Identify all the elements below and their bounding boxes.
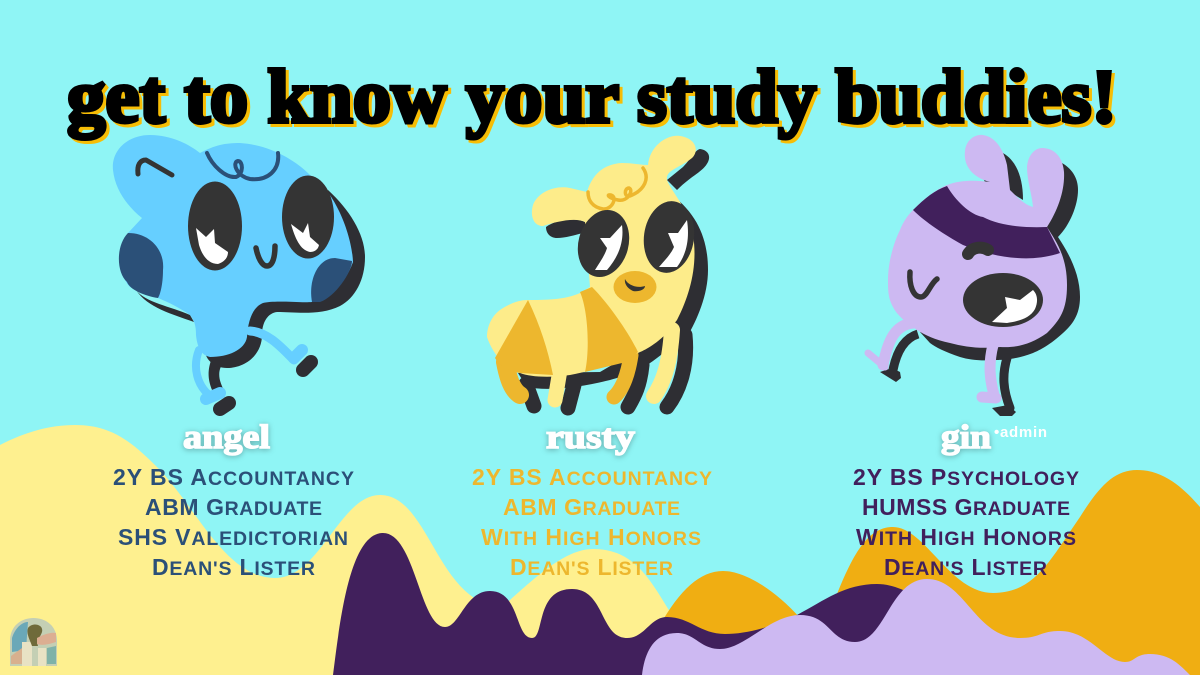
details: angel: DEAN'S LISTER (152, 554, 315, 580)
angel shadow (136, 190, 365, 398)
gin headband (913, 186, 1060, 258)
details: rusty: ABM GRADUATE (503, 494, 680, 520)
rusty stripes (495, 287, 638, 375)
angel body (113, 135, 353, 357)
character: gin (868, 135, 1080, 416)
details: rusty: WITH HIGH HONORS (481, 524, 701, 550)
details: gin (853, 464, 1079, 580)
details: angel: ABM GRADUATE (145, 494, 322, 520)
details: rusty (472, 464, 712, 580)
details: gin: WITH HIGH HONORS (856, 524, 1076, 550)
gin shadow (920, 153, 1080, 360)
logo badge (10, 618, 57, 666)
gin body (888, 135, 1067, 348)
rusty snout (614, 271, 656, 303)
gin dark legs (880, 334, 1016, 416)
angel legs (196, 331, 302, 399)
details: rusty: 2Y BS ACCOUNTANCY (472, 464, 712, 490)
column: rusty (472, 419, 712, 580)
angel cheeks (119, 233, 352, 302)
details: rusty: DEAN'S LISTER (510, 554, 673, 580)
rusty dark legs (526, 335, 686, 408)
details: angel: 2Y BS ACCOUNTANCY (113, 464, 354, 490)
name: angel: angel (183, 419, 270, 456)
details: angel: SHS VALEDICTORIAN (118, 524, 348, 550)
background wavy hills (0, 425, 1200, 675)
details: gin: 2Y BS PSYCHOLOGY (853, 464, 1079, 490)
name: rusty: rusty (546, 419, 635, 456)
details: gin: DEAN'S LISTER (884, 554, 1047, 580)
character: angel (113, 135, 365, 409)
rusty eyes (571, 198, 699, 283)
angel feet (220, 362, 311, 409)
details: gin: HUMSS GRADUATE (862, 494, 1070, 520)
angel eyes (188, 176, 334, 270)
details: angel (113, 464, 354, 580)
name: gin: gin (941, 419, 991, 456)
rusty front legs (505, 330, 672, 400)
gin lavender legs (868, 323, 996, 398)
rusty shadow (518, 149, 709, 389)
title: get to know your study buddies! (70, 58, 1120, 142)
angel face marks (138, 153, 278, 266)
character: rusty (487, 136, 709, 408)
rusty curl (588, 168, 646, 209)
column: angel (113, 419, 354, 580)
title: get to know your study buddies! (67, 55, 1117, 139)
admin tag: •admin (994, 424, 1047, 441)
gin face (910, 248, 1043, 327)
column: gin (853, 419, 1079, 580)
rusty body (487, 136, 696, 377)
